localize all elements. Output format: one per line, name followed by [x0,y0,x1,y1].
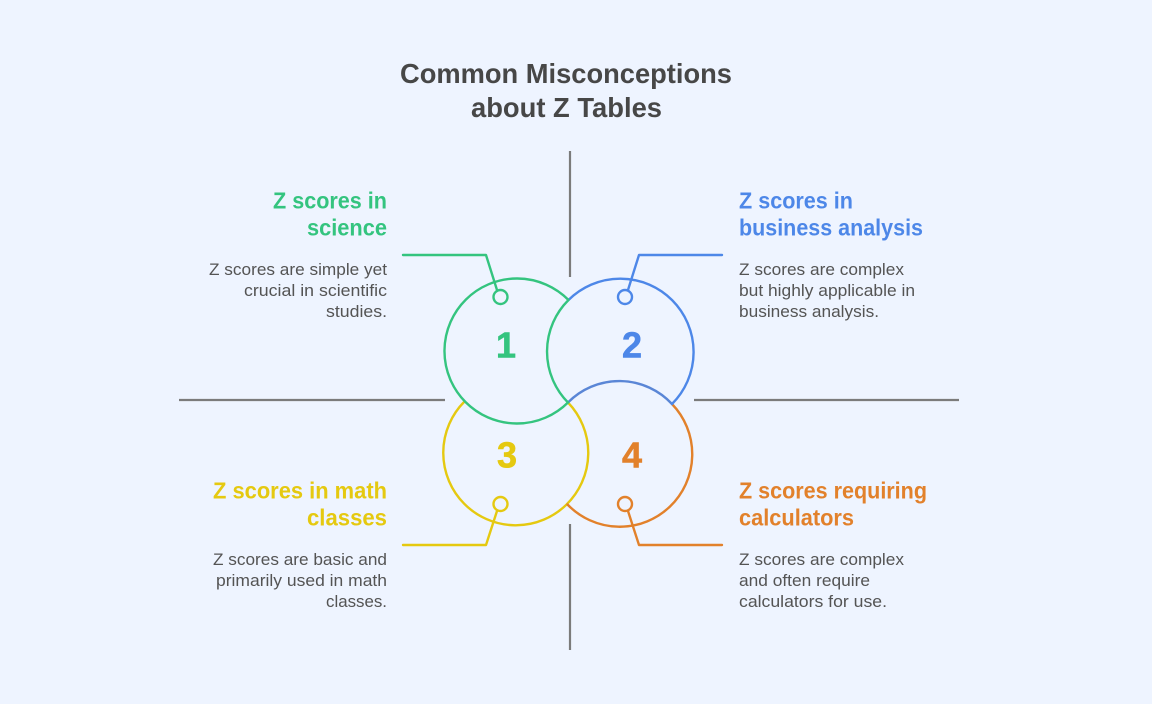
connector 4 [618,497,722,545]
text block: business analysis: Z scores are complex [739,261,905,279]
connector 2 [618,255,722,304]
text block: business analysis: business analysis. [739,303,879,321]
number 2: 2 [622,324,642,366]
text block: calculators: Z scores are complex [739,551,905,569]
text block: math classes: classes. [326,593,387,611]
text block: business analysis: Z scores in [739,188,853,214]
text block: math classes [213,478,387,611]
text block: science: Z scores are simple yet [209,261,387,279]
circle 4 outline: orange [568,404,692,527]
text block: calculators: Z scores requiring [739,478,927,504]
connector 3 [403,497,508,545]
text block: science: studies. [326,303,387,321]
text block: science [209,188,387,321]
number 3: 3 [497,434,517,476]
text block: science: crucial in scientific [244,282,387,300]
connector 1 [403,255,508,304]
circle diagram [443,278,694,527]
text block: calculators: and often require [739,572,870,590]
title: about Z Tables [471,92,662,123]
title [400,58,732,123]
circle 2 outline: blue [568,279,694,404]
text block: math classes: Z scores in math [213,478,387,504]
text block: calculators: calculators for use. [739,593,887,611]
circle 3 outline: yellow [443,402,588,525]
number 1: 1 [496,324,516,366]
circle 4 top arc: blue [568,381,672,404]
text block: math classes: classes [307,504,387,530]
title: Common Misconceptions [400,58,732,89]
text block: math classes: Z scores are basic and [213,551,387,569]
circle 1 outline: green [444,278,568,423]
text block: calculators: calculators [739,504,854,530]
text block: business analysis [739,188,923,321]
text block: science: Z scores in [273,188,387,214]
text block: calculators [739,478,927,611]
text block: science: science [307,214,387,240]
number 4: 4 [622,434,642,476]
text block: math classes: primarily used in math [216,572,387,590]
text block: business analysis: business analysis [739,214,923,240]
text block: business analysis: but highly applicable in [739,282,915,300]
